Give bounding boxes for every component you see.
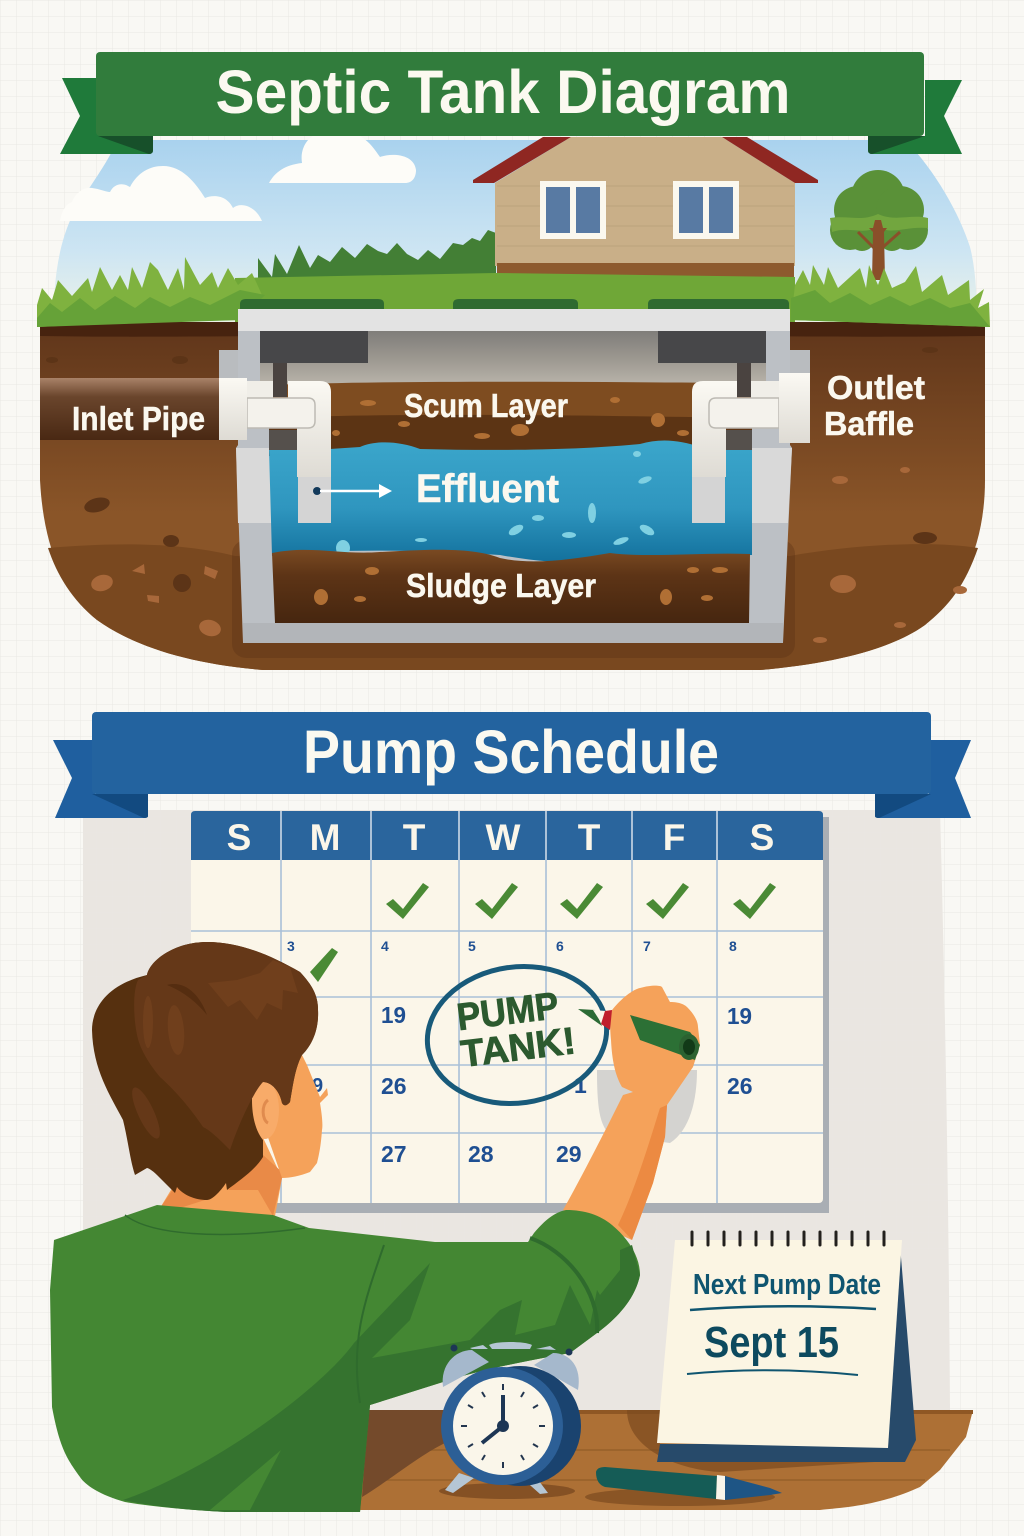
date numbers: 6 — [556, 938, 564, 954]
desk calendar note — [657, 1232, 916, 1462]
sky — [53, 140, 977, 325]
date numbers: 19 — [727, 1003, 752, 1029]
date numbers: 29 — [556, 1141, 582, 1167]
neck — [160, 1110, 282, 1216]
water flecks — [336, 451, 656, 556]
desk dark shadow — [362, 1410, 445, 1497]
lawn — [235, 273, 795, 322]
shirt — [50, 1205, 640, 1512]
face — [262, 1055, 328, 1178]
date numbers — [287, 938, 753, 1167]
tank — [219, 309, 810, 643]
heading: pump schedule banner: Pump Schedule — [303, 718, 719, 786]
cloud top — [269, 136, 416, 183]
date numbers: 26 — [727, 1073, 753, 1099]
grass right — [791, 265, 990, 327]
label: scum layer: Scum Layer — [404, 387, 568, 424]
panel: pump schedule scene — [50, 810, 973, 1512]
roof — [473, 137, 818, 183]
marker — [578, 1009, 700, 1060]
stones in tank — [314, 397, 728, 605]
hedge — [258, 230, 496, 278]
date numbers: 26 — [381, 1073, 407, 1099]
arm and hand — [563, 986, 700, 1240]
check marks — [310, 883, 776, 982]
desk shadows — [439, 1483, 575, 1499]
label: outlet baffle — [824, 369, 925, 442]
pump tank callout: TANK! — [459, 1020, 578, 1076]
house — [473, 137, 818, 277]
lids — [240, 299, 789, 309]
weekday headers: S — [750, 817, 774, 858]
pen — [596, 1467, 782, 1500]
flow arrow — [313, 484, 392, 498]
tree — [830, 170, 928, 280]
heading: septic tank diagram banner: Septic Tank Diagram — [216, 58, 790, 126]
soil stones — [46, 347, 967, 643]
soil — [40, 322, 985, 670]
heading: septic tank diagram banner — [60, 52, 962, 154]
label: sludge layer: Sludge Layer — [406, 567, 596, 604]
inlet pipe band — [40, 378, 222, 440]
lower soil stratum — [48, 544, 978, 670]
date numbers: 5 — [468, 938, 476, 954]
panel: septic diagram scene — [37, 136, 990, 670]
window left — [540, 181, 606, 239]
person — [50, 942, 700, 1512]
grass left — [37, 257, 265, 327]
next pump date: Next Pump Date — [693, 1269, 881, 1301]
pump tank callout — [418, 955, 616, 1115]
label: effluent: Effluent — [416, 467, 559, 511]
sept 15: Sept 15 — [704, 1318, 839, 1367]
scum layer — [269, 382, 752, 456]
cloud left — [60, 166, 262, 221]
weekday headers: T — [578, 817, 601, 858]
weekday headers: S — [227, 817, 251, 858]
date numbers: 9 — [312, 1075, 323, 1097]
wall backdrop — [83, 810, 950, 1410]
label: inlet pipe: Inlet Pipe — [72, 400, 205, 437]
date numbers: 3 — [287, 938, 295, 954]
date numbers: 7 — [643, 938, 651, 954]
weekday headers: M — [310, 817, 340, 858]
arm shadow — [597, 1070, 697, 1143]
heading: pump schedule banner — [53, 712, 971, 818]
label: outlet baffle: Outlet — [827, 369, 925, 406]
date numbers: 19 — [381, 1002, 406, 1028]
weekday headers: T — [403, 817, 426, 858]
pump tank callout: PUMP — [455, 985, 561, 1039]
alarm clock — [441, 1342, 581, 1494]
water — [269, 440, 752, 563]
date numbers: 8 — [729, 938, 737, 954]
ear — [251, 1081, 279, 1139]
weekday headers: F — [663, 817, 685, 858]
dark inlet and outlet blocks — [260, 331, 368, 363]
date numbers: 4 — [381, 938, 389, 954]
hair — [92, 942, 318, 1200]
date numbers: 1 — [574, 1072, 587, 1098]
weekday headers: W — [486, 817, 521, 858]
weekday headers — [227, 817, 774, 858]
label: outlet baffle: Baffle — [824, 405, 914, 442]
spiral rings — [692, 1232, 884, 1245]
date numbers: 27 — [381, 1141, 407, 1167]
inlet pipe fitting — [219, 378, 331, 523]
tank shadow — [232, 540, 795, 658]
sludge layer — [272, 550, 750, 623]
date numbers: 28 — [468, 1141, 494, 1167]
calendar — [191, 811, 829, 1213]
outlet baffle fitting — [692, 373, 810, 523]
window right — [673, 181, 739, 239]
desk — [360, 1410, 973, 1510]
